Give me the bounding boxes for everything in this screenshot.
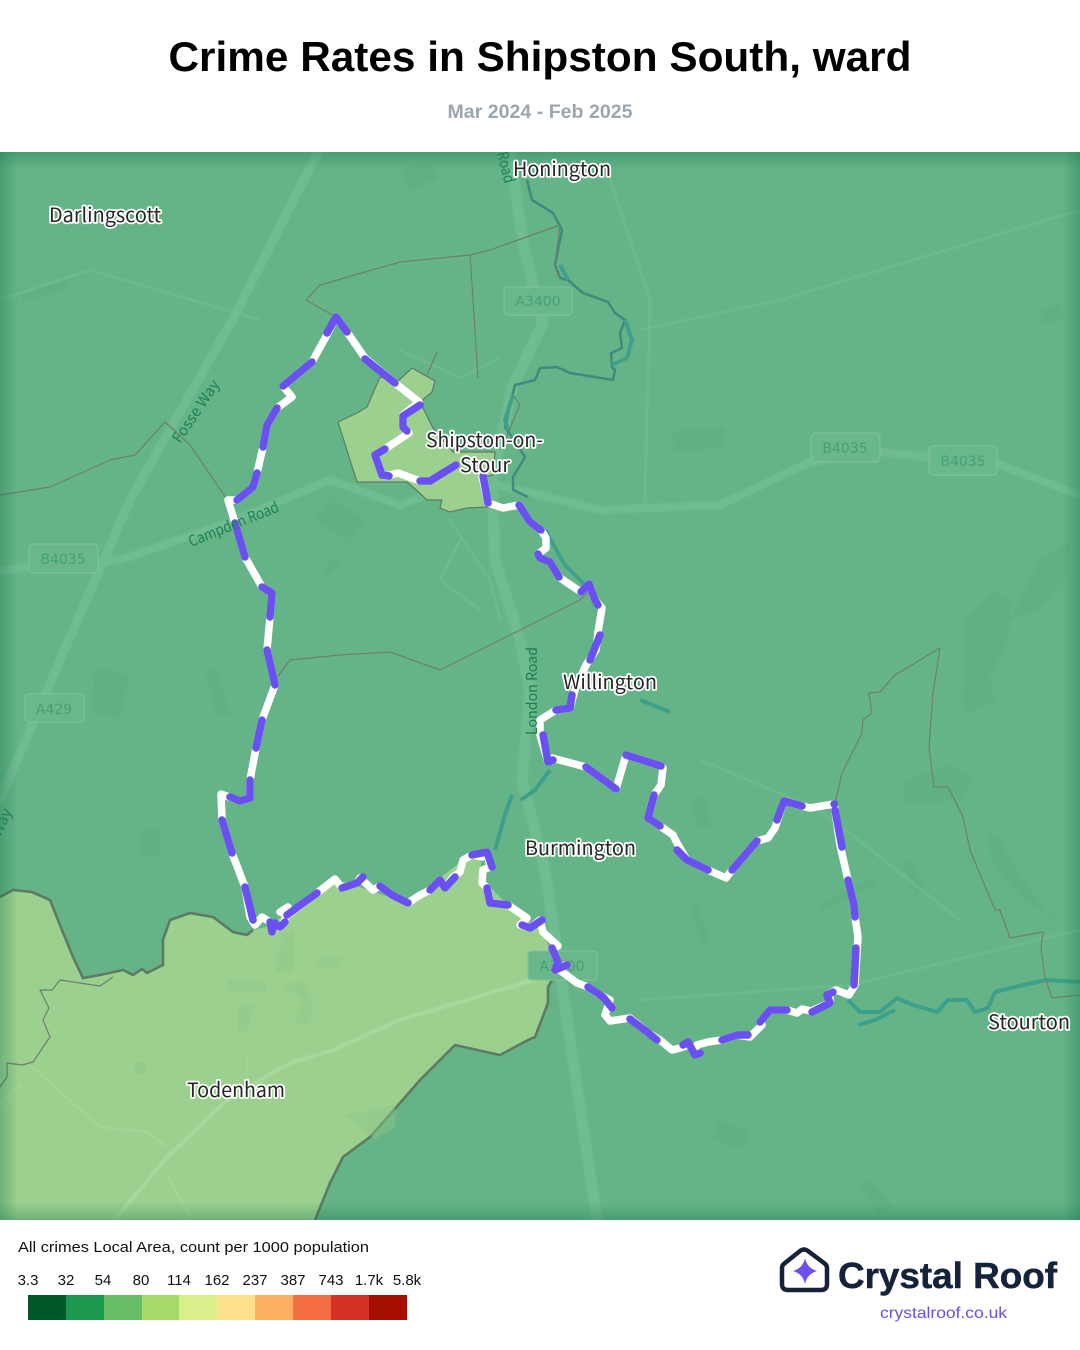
icon: house with star bbox=[782, 1250, 827, 1290]
legend values: 80 bbox=[133, 1272, 149, 1289]
legend values: 114 bbox=[167, 1272, 191, 1289]
legend title: All crimes Local Area, count per 1000 population bbox=[18, 1239, 369, 1256]
legend values: 54 bbox=[95, 1272, 111, 1289]
legend values: 1.7k bbox=[355, 1272, 384, 1289]
road badges: B4035 bbox=[940, 454, 986, 470]
road badges: B4035 bbox=[40, 552, 86, 568]
road labels: Fosse Way bbox=[167, 375, 225, 447]
label: Burmington: Burmington bbox=[525, 832, 636, 861]
road labels bbox=[0, 149, 542, 840]
place labels: Stour bbox=[460, 449, 510, 478]
road badges: A429 bbox=[36, 702, 72, 718]
logo: Crystal Roof bbox=[782, 1250, 1058, 1322]
legend values: 3.3 bbox=[18, 1272, 38, 1289]
region: Shipston light area bbox=[338, 368, 495, 512]
legend bbox=[18, 1239, 422, 1320]
ward boundary: purple dashes bbox=[222, 317, 856, 1055]
legend values bbox=[18, 1272, 422, 1289]
road badges: A3400 bbox=[539, 959, 585, 975]
Todenham roads bbox=[0, 975, 550, 1217]
legend values: 162 bbox=[204, 1272, 230, 1289]
legend values: 387 bbox=[280, 1272, 306, 1289]
legend values: 237 bbox=[242, 1272, 268, 1289]
legend values: 32 bbox=[58, 1272, 74, 1289]
title: Crime Rates in Shipston South, ward bbox=[168, 33, 911, 80]
logo URL: crystalroof.co.uk bbox=[880, 1305, 1008, 1322]
legend values: 743 bbox=[318, 1272, 344, 1289]
label: Shipston-on-Stour: Shipston-on- bbox=[426, 424, 543, 453]
legend colour scale bbox=[28, 1295, 407, 1320]
legend values: 5.8k bbox=[393, 1272, 422, 1289]
road labels: Road bbox=[492, 149, 520, 185]
map panel bbox=[0, 149, 1080, 1220]
logo wordmark: Crystal Roof bbox=[838, 1255, 1058, 1296]
label: Honington: Honington bbox=[513, 153, 611, 182]
boundary lines bbox=[0, 225, 1080, 1087]
map base area bbox=[0, 152, 1080, 1220]
label: Stourton: Stourton bbox=[988, 1006, 1070, 1035]
place labels bbox=[49, 153, 1070, 1103]
road labels: Campden Road bbox=[185, 496, 282, 552]
label: Darlingscott: Darlingscott bbox=[49, 199, 161, 228]
ward boundary: white dashes bbox=[221, 317, 858, 1053]
road badges bbox=[25, 287, 997, 980]
road labels: London Road bbox=[521, 647, 542, 735]
region: Todenham light area bbox=[0, 858, 558, 1220]
Todenham boundary edge bbox=[0, 890, 558, 1220]
label: Todenham: Todenham bbox=[187, 1074, 285, 1103]
vignette bbox=[0, 152, 1080, 1220]
rivers bbox=[495, 180, 1080, 1025]
Todenham field detail bbox=[370, 1106, 396, 1138]
road badges: B4035 bbox=[822, 441, 868, 457]
subtitle: date range: Mar 2024 - Feb 2025 bbox=[448, 102, 633, 123]
road badges: A3400 bbox=[515, 294, 561, 310]
field and woodland patches bbox=[20, 160, 1070, 1215]
label: Willington: Willington bbox=[563, 666, 657, 695]
roads bbox=[0, 152, 1080, 1220]
